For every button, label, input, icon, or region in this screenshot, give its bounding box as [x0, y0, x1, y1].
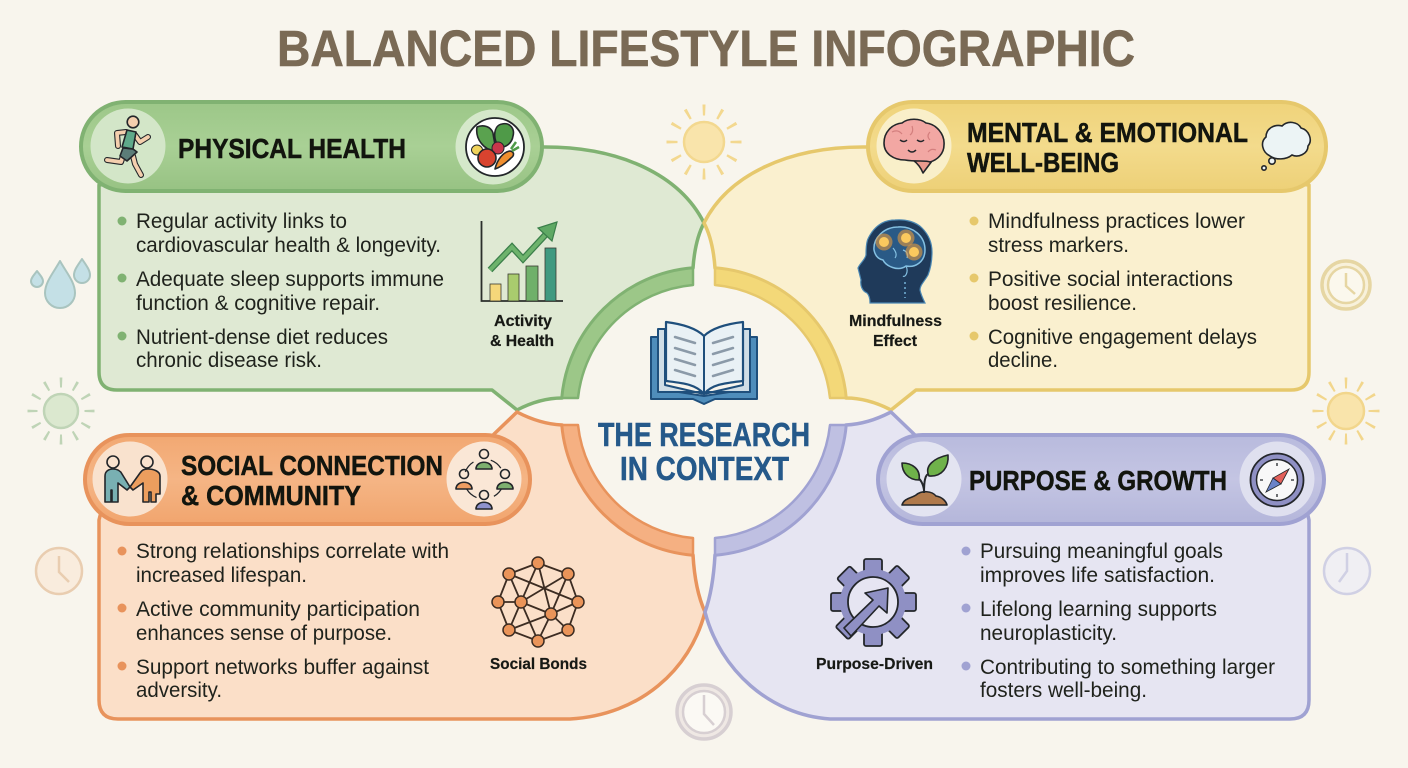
- icon: handshake: [92, 442, 168, 516]
- decoration: top sun: [672, 110, 736, 174]
- icon: food plate: [456, 110, 530, 184]
- heading: mental: MENTAL & EMOTIONAL: [967, 117, 1248, 148]
- bullet list: mental: stress markers.: [988, 234, 1129, 257]
- icon: gear with arrow: [831, 559, 916, 646]
- heading: mental: [967, 117, 1248, 178]
- label: social bonds: Social Bonds: [490, 656, 587, 673]
- label: activity and health: & Health: [490, 333, 554, 350]
- arc band: orange: [562, 425, 693, 555]
- panel body: physical health: [99, 147, 704, 410]
- icon: compass: [1240, 442, 1314, 516]
- bullet list: social: adversity.: [136, 679, 222, 702]
- heading: social: [181, 450, 443, 511]
- heading: mental: WELL-BEING: [967, 147, 1119, 178]
- decoration: left sun: [32, 382, 90, 440]
- bullet list: social: enhances sense of purpose.: [136, 622, 392, 645]
- icon: open book: [651, 322, 757, 404]
- bullet list: mental: Mindfulness practices lower: [988, 210, 1245, 233]
- icon: community circle: [446, 442, 522, 516]
- heading: purpose: PURPOSE & GROWTH: [969, 465, 1227, 496]
- panel: mental and emotional well-being: [704, 102, 1326, 410]
- panel body: mental: [704, 147, 1309, 410]
- decoration: right clock yellow: [1322, 261, 1370, 309]
- icon: brain: [876, 108, 952, 184]
- bullet list: physical health: function & cognitive repair.: [136, 292, 380, 315]
- bullet list: social: Active community participation: [136, 598, 420, 621]
- decoration: right clock purple: [1324, 548, 1370, 594]
- arc band: purple: [715, 425, 846, 555]
- label: mindfulness effect: [849, 313, 942, 350]
- bullet list: physical health: Nutrient-dense diet reduces: [136, 326, 388, 349]
- panel: social connection and community: [85, 412, 705, 719]
- icon circle: runner: [90, 108, 166, 184]
- bullet list: physical health: [118, 210, 444, 372]
- bullet list: purpose: [962, 540, 1275, 702]
- panel: physical health: [81, 102, 704, 410]
- bullet list: mental: decline.: [988, 349, 1058, 372]
- label: mindfulness effect: Mindfulness: [849, 313, 942, 330]
- icon: thought cloud: [1262, 122, 1310, 170]
- bullet list: purpose: Lifelong learning supports: [980, 598, 1217, 621]
- bullet list: physical health: chronic disease risk.: [136, 349, 322, 372]
- bullet list: purpose: fosters well-being.: [980, 679, 1147, 702]
- bullet list: mental: [970, 210, 1257, 372]
- label: activity and health: Activity: [494, 313, 552, 330]
- decoration: right sun: [1318, 383, 1374, 439]
- bullet list: social: Support networks buffer against: [136, 656, 429, 679]
- decoration: water drops: [31, 259, 90, 308]
- heading: the research in context: THE RESEARCH: [598, 416, 810, 453]
- icon: social network: [492, 557, 584, 647]
- bullet list: purpose: Pursuing meaningful goals: [980, 540, 1223, 563]
- bullet list: mental: boost resilience.: [988, 292, 1137, 315]
- label: mindfulness effect: Effect: [873, 333, 917, 350]
- bullet list: physical health: cardiovascular health & longevity.: [136, 234, 441, 257]
- panel body: social: [99, 412, 705, 719]
- label: purpose-driven: Purpose-Driven: [816, 656, 933, 673]
- header pill: mental: [868, 102, 1326, 191]
- chart: activity and health: [482, 221, 563, 301]
- label: activity and health: [490, 313, 554, 350]
- bullet list: physical health: Regular activity links to: [136, 210, 347, 233]
- decoration: left clock orange: [36, 548, 82, 594]
- header pill: physical health: [81, 102, 542, 191]
- bullet list: purpose: neuroplasticity.: [980, 622, 1117, 645]
- heading: physical health: PHYSICAL HEALTH: [178, 133, 406, 164]
- title: BALANCED LIFESTYLE INFOGRAPHIC: [277, 20, 1135, 77]
- center: the research in context: [598, 322, 810, 487]
- heading: the research in context: IN CONTEXT: [620, 450, 789, 487]
- panel: purpose and growth: [705, 412, 1324, 719]
- bullet list: purpose: improves life satisfaction.: [980, 564, 1215, 587]
- arc band: green: [562, 268, 693, 398]
- bullet list: social: Strong relationships correlate with: [136, 540, 449, 563]
- arc band: yellow: [715, 268, 846, 398]
- heading: the research in context: [598, 416, 810, 487]
- bullet list: mental: Cognitive engagement delays: [988, 326, 1257, 349]
- header pill: social: [85, 435, 530, 524]
- panel body: purpose: [705, 412, 1309, 719]
- bullet list: purpose: Contributing to something larger: [980, 656, 1275, 679]
- header pill: purpose: [878, 435, 1324, 524]
- icon: sprout: [886, 442, 962, 516]
- bullet list: mental: Positive social interactions: [988, 268, 1233, 291]
- bullet list: physical health: Adequate sleep supports immune: [136, 268, 444, 291]
- bullet list: social: increased lifespan.: [136, 564, 307, 587]
- decoration: bottom clock: [677, 685, 731, 739]
- bullet list: social: [118, 540, 449, 702]
- heading: social: & COMMUNITY: [181, 480, 361, 511]
- icon: glowing mind head: [858, 220, 932, 303]
- heading: social: SOCIAL CONNECTION: [181, 450, 443, 481]
